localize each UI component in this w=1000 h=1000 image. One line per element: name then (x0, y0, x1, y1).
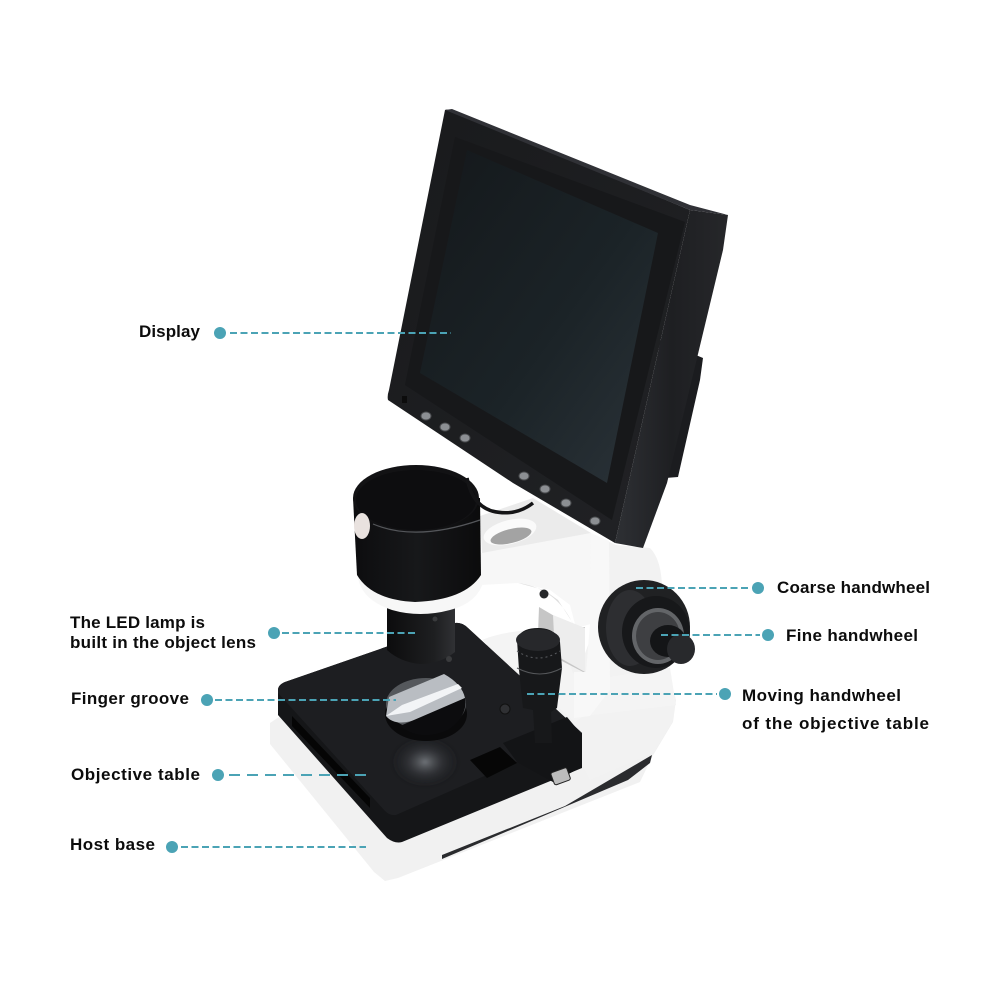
callout: LED lamp (70, 613, 418, 652)
moving handwheel (516, 628, 562, 743)
coarse and fine handwheels (598, 580, 695, 674)
column (482, 533, 676, 780)
callout: Display (139, 322, 451, 341)
callout: Moving handwheel: Moving handwheel (742, 686, 901, 705)
callout: Host base: Host base (70, 835, 155, 854)
callout: LED lamp: The LED lamp is (70, 613, 205, 632)
callout: Finger groove (71, 689, 396, 708)
arm (480, 498, 610, 718)
stage table (278, 623, 582, 842)
monitor rear bump (640, 340, 703, 480)
callout: Moving handwheel (527, 686, 929, 733)
monitor side edge (615, 210, 728, 548)
bevel (405, 137, 685, 520)
callout: Finger groove: Finger groove (71, 689, 189, 708)
objective lens tube with LED (387, 608, 455, 664)
monitor bezel (388, 110, 690, 543)
screen (420, 150, 658, 483)
host base (270, 640, 676, 881)
display monitor (388, 109, 728, 548)
microscope illustration (270, 109, 728, 881)
callout: Fine handwheel (661, 626, 918, 645)
lamp housing cup (353, 465, 481, 602)
control buttons (402, 396, 600, 525)
callout: Fine handwheel: Fine handwheel (786, 626, 918, 645)
finger groove lens (385, 674, 467, 741)
cable (467, 478, 533, 513)
callout: Coarse handwheel: Coarse handwheel (777, 578, 930, 597)
white collar (358, 556, 484, 614)
callout: Objective table: Objective table (71, 765, 200, 784)
callout: LED lamp: built in the object lens (70, 633, 256, 652)
callout: Moving handwheel: of the objective table (742, 714, 929, 733)
callout: Display: Display (139, 322, 201, 341)
callout: Host base (70, 835, 366, 854)
callout: Objective table (71, 765, 368, 784)
callout: Coarse handwheel (636, 578, 930, 597)
